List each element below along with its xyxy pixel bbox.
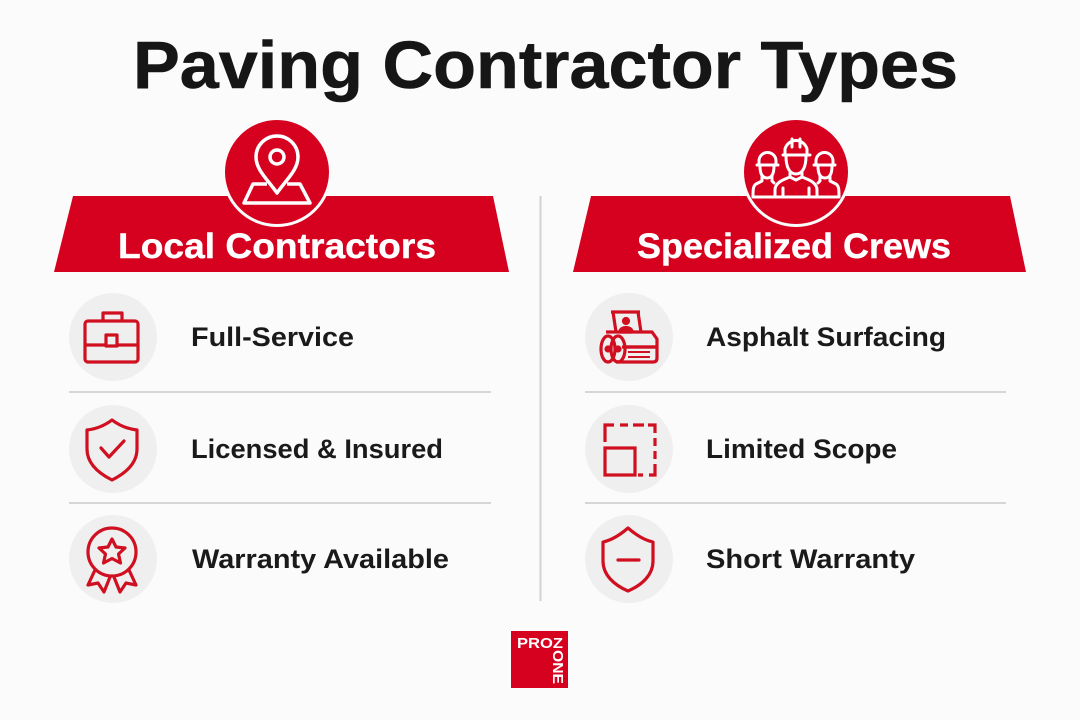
- icon: workers badge: [742, 118, 850, 226]
- row dividers: [69, 392, 491, 503]
- logo: prozone: PROZ: [517, 636, 563, 652]
- icon: award ribbon: [88, 528, 136, 592]
- item: licensed and insured: Licensed & Insured: [191, 434, 443, 464]
- item: licensed and insured: [69, 405, 443, 493]
- logo: prozone: ONE: [549, 650, 565, 684]
- item: asphalt surfacing: [585, 293, 946, 381]
- logo: prozone: [511, 631, 568, 688]
- banner: local contractors: [54, 196, 509, 272]
- item: short warranty: Short Warranty: [706, 544, 915, 574]
- item: short warranty: [585, 515, 915, 603]
- icon: shield check: [87, 420, 137, 480]
- title: Paving Contractor Types: [133, 28, 958, 103]
- icon: map pin badge: [224, 118, 330, 226]
- panel: specialized crews: [573, 118, 1026, 603]
- item: full-service: [69, 293, 354, 381]
- item: limited scope: Limited Scope: [706, 434, 897, 464]
- icon: dashed resize square: [605, 425, 655, 475]
- panel: local contractors: [54, 118, 509, 603]
- heading: local contractors: Local Contractors: [118, 227, 436, 266]
- row dividers: [585, 392, 1006, 503]
- banner: specialized crews: [573, 196, 1026, 272]
- icon: briefcase: [85, 313, 138, 362]
- icon: road roller: [601, 312, 657, 362]
- icon: shield minus: [603, 528, 653, 591]
- heading: specialized crews: Specialized Crews: [637, 227, 951, 266]
- item: warranty available: Warranty Available: [192, 544, 449, 574]
- item: warranty available: [69, 515, 449, 603]
- item: full-service: Full-Service: [191, 322, 354, 352]
- item: asphalt surfacing: Asphalt Surfacing: [706, 322, 946, 352]
- item: limited scope: [585, 405, 897, 493]
- center divider: [540, 196, 542, 601]
